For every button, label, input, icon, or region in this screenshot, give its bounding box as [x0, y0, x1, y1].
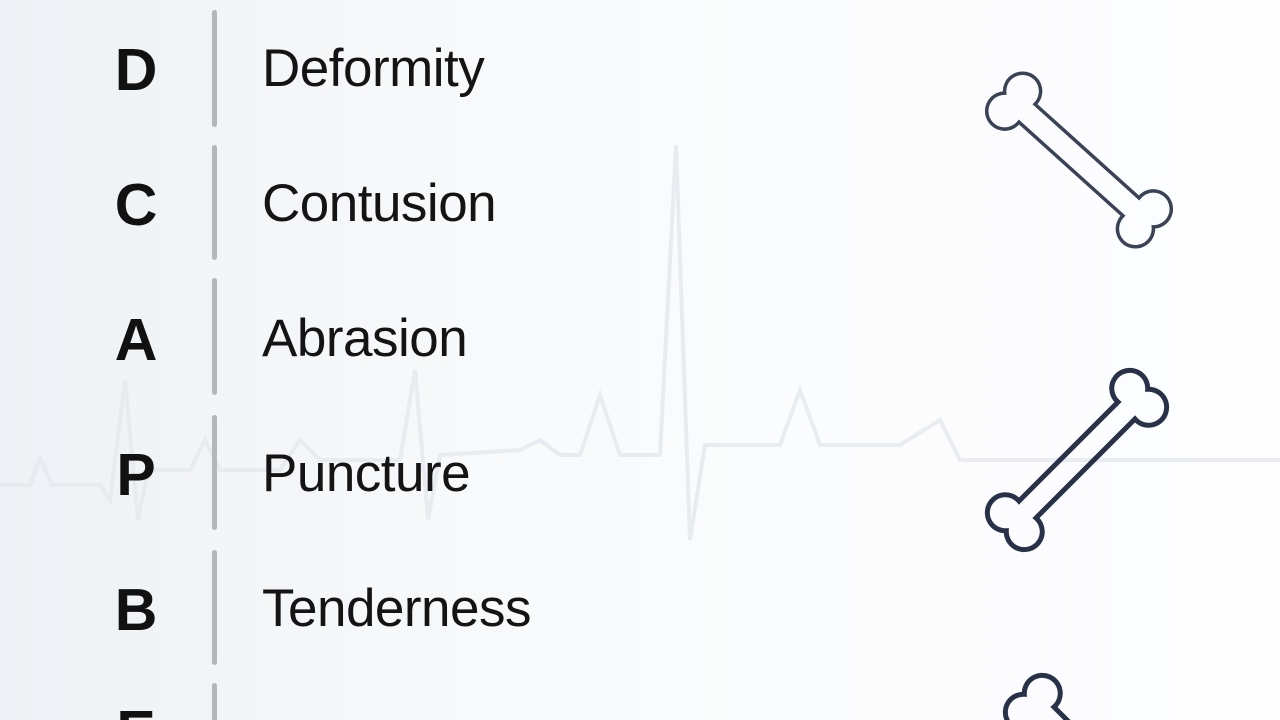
word: Abrasion: Abrasion — [262, 309, 467, 368]
row D: D — [115, 37, 157, 103]
word: Contusion: Contusion — [262, 174, 496, 233]
row P: P — [116, 442, 156, 508]
word: Puncture: Puncture — [262, 444, 470, 503]
icon: bone 1 — [979, 66, 1179, 254]
row A: A — [115, 307, 157, 373]
icon: bone 2 — [980, 363, 1174, 557]
row B: B — [115, 577, 157, 643]
icon: bone 3 — [998, 668, 1192, 720]
word: Deformity: Deformity — [262, 39, 484, 98]
row C: C — [115, 172, 157, 238]
word: Tenderness: Tenderness — [262, 579, 531, 638]
